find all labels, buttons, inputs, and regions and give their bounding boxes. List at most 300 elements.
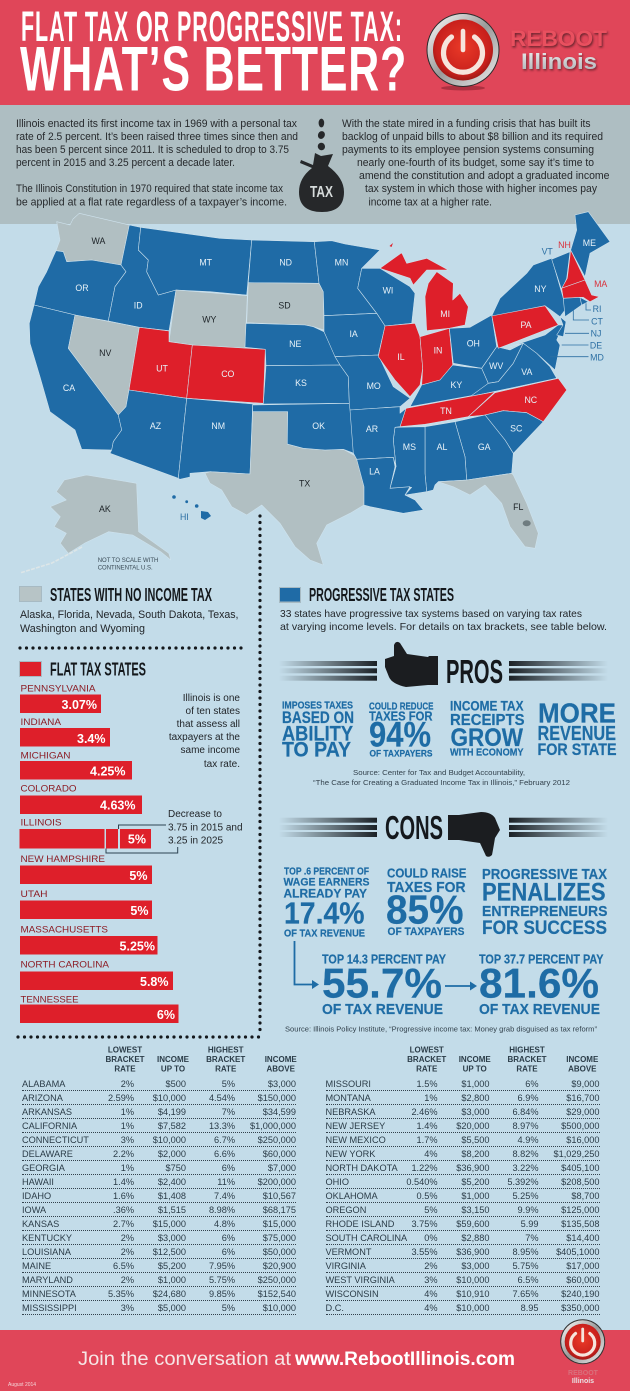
- cons: could raise taxes for 85 percent: 85%: [386, 886, 464, 932]
- table: state tax brackets, Missouri to D.C.: $10,000: [456, 1275, 490, 1285]
- map state labels: VT: [542, 246, 553, 256]
- map state labels: MN: [335, 258, 348, 268]
- map state labels: ID: [134, 300, 143, 310]
- table: state tax brackets, Missouri to D.C.: $36,900: [456, 1163, 490, 1173]
- map state labels: OK: [312, 421, 325, 431]
- table: state tax brackets, Alabama to Mississippi: $1,000: [158, 1275, 186, 1285]
- callout: Illinois is one of ten states: tax rate.: [204, 759, 240, 770]
- table: state tax brackets, Alabama to Mississippi: 13.3%: [209, 1121, 235, 1131]
- table: state tax brackets, Alabama to Mississippi: $2,000: [158, 1149, 186, 1159]
- table: state tax brackets, Missouri to D.C.: $1,000: [461, 1079, 490, 1089]
- bar chart: flat tax rates: MASSACHUSETTS: [20, 924, 108, 934]
- table: state tax brackets, Missouri to D.C.: $135,508: [561, 1219, 600, 1229]
- map state labels: IA: [349, 329, 358, 339]
- map state labels: IL: [397, 352, 405, 362]
- table headers: left: [105, 1046, 297, 1074]
- table: state tax brackets, Alabama to Mississippi: ARIZONA: [22, 1093, 63, 1103]
- table: state tax brackets, Missouri to D.C.: $60,000: [566, 1275, 600, 1285]
- table: state tax brackets, Missouri to D.C.: NEW MEXICO: [326, 1135, 386, 1145]
- pros source: [313, 768, 570, 787]
- table: state tax brackets, Missouri to D.C.: 8.97%: [512, 1121, 538, 1131]
- legend: progressive tax states: at varying income levels. For details on tax brackets, see table below.: [280, 622, 607, 633]
- table: state tax brackets, Missouri to D.C.: 5.392%: [507, 1177, 538, 1187]
- table: state tax brackets, Missouri to D.C.: 0%: [424, 1233, 438, 1243]
- table: state tax brackets, Alabama to Mississippi: CONNECTICUT: [22, 1135, 89, 1145]
- map state labels: NE: [289, 339, 302, 349]
- table: state tax brackets, Alabama to Mississippi: DELAWARE: [22, 1149, 73, 1159]
- table: state tax brackets, Alabama to Mississippi: $5,000: [158, 1303, 186, 1313]
- intro text: left column: be applied at a flat rate regardless of a taxpayer’s income.: [16, 196, 287, 208]
- title: WHAT’S BETTER?: [20, 34, 406, 105]
- cons: top .6 percent pay 17.4 percent: ALREADY PAY: [284, 886, 367, 900]
- map state labels: MD: [590, 352, 604, 362]
- cons: top 37.7 percent pay 81.6 percent: 81.6%: [479, 960, 599, 1007]
- map state labels: IN: [434, 346, 442, 356]
- table: state tax brackets, Alabama to Mississippi: $10,000: [153, 1093, 186, 1103]
- table: state tax brackets, Alabama to Mississippi: $1,515: [158, 1205, 186, 1215]
- footer call to action: Join the conversation at: [78, 1349, 292, 1370]
- table: state tax brackets, Missouri to D.C.: $125,000: [561, 1205, 600, 1215]
- logo wordmark: REBOOT: [511, 28, 609, 52]
- table: state tax brackets, Missouri to D.C.: WISCONSIN: [326, 1289, 379, 1299]
- cons: top 37.7 percent pay 81.6 percent: [479, 952, 604, 1018]
- table: state tax brackets, Alabama to Mississippi: 6%: [222, 1247, 235, 1257]
- pros heading: PROS: [446, 654, 503, 691]
- map scale note: NOT TO SCALE WITH: [98, 558, 158, 564]
- table: state tax brackets, Alabama to Mississippi: $200,000: [258, 1177, 296, 1187]
- table: state tax brackets, Alabama to Mississippi: HAWAII: [22, 1177, 54, 1187]
- map state labels: MI: [440, 309, 450, 319]
- table: state tax brackets, Missouri to D.C.: $59,600: [456, 1219, 490, 1229]
- table: state tax brackets, Alabama to Mississippi: KANSAS: [22, 1219, 59, 1229]
- table: state tax brackets, Missouri to D.C.: NEBRASKA: [326, 1107, 376, 1117]
- table: state tax brackets, Alabama to Mississippi: $10,000: [153, 1135, 186, 1145]
- cons: top 14.3 percent pay 55.7 percent: [322, 952, 447, 1018]
- table: state tax brackets, Missouri to D.C.: MISSOURI: [326, 1079, 371, 1089]
- table: state tax brackets, Alabama to Mississippi: 6%: [222, 1233, 235, 1243]
- map state labels: AZ: [150, 421, 162, 431]
- table: state tax brackets, Missouri to D.C.: 5%: [424, 1205, 438, 1215]
- map state labels: PA: [520, 320, 532, 330]
- map state labels: AK: [99, 504, 111, 514]
- table: state tax brackets, Missouri to D.C.: $2,880: [461, 1233, 490, 1243]
- table: state tax brackets, Alabama to Mississippi: ALABAMA: [22, 1079, 65, 1089]
- pros: imposes taxes based on ability to pay: [282, 701, 354, 762]
- table: state tax brackets, Alabama to Mississippi: $15,000: [263, 1219, 296, 1229]
- cons: top 14.3 percent pay 55.7 percent: TOP 14.3 PERCENT PAY: [322, 952, 447, 966]
- footer logo: [560, 1319, 605, 1385]
- table: state tax brackets, Alabama to Mississippi: 11%: [217, 1177, 235, 1187]
- map state labels: SD: [278, 300, 291, 310]
- bar chart: flat tax rates: 5.25%: [120, 940, 155, 954]
- pros: could reduce taxes for 94 percent: [369, 701, 434, 758]
- table: state tax brackets, Missouri to D.C.: OHIO: [326, 1177, 349, 1187]
- table: state tax brackets, Alabama to Mississippi: $4,199: [158, 1107, 186, 1117]
- cons: top .6 percent pay 17.4 percent: [284, 866, 370, 940]
- table headers: right: HIGHEST: [509, 1046, 545, 1055]
- table: state tax brackets, Alabama to Mississippi: $250,000: [258, 1135, 296, 1145]
- cons: top 37.7 percent pay 81.6 percent: TOP 37.7 PERCENT PAY: [479, 952, 604, 966]
- cons: could raise taxes for 85 percent: OF TAXPAYERS: [388, 926, 464, 938]
- table: state tax brackets, Alabama to Mississippi: $24,680: [153, 1289, 186, 1299]
- map state labels: SC: [510, 424, 523, 434]
- table: state tax brackets, Alabama to Mississippi: 5.75%: [209, 1275, 235, 1285]
- table: state tax brackets, Missouri to D.C.: $350,000: [561, 1303, 600, 1313]
- table: state tax brackets, Missouri to D.C.: $9,000: [571, 1079, 600, 1089]
- intro text: left column: percent in 2015 and 3.25 percent a decade later.: [16, 157, 235, 169]
- icon: thumbs down: [448, 812, 500, 857]
- table: state tax brackets, Missouri to D.C.: 5.25%: [512, 1191, 538, 1201]
- table headers: right: UP TO: [463, 1065, 487, 1074]
- cons: could raise taxes for 85 percent: TAXES FOR: [387, 879, 466, 896]
- table: state tax brackets, Missouri to D.C.: $10,910: [456, 1289, 490, 1299]
- map state labels: KY: [451, 380, 462, 390]
- table: state tax brackets, Missouri to D.C.: 3.55%: [411, 1247, 438, 1257]
- table: state tax brackets, Alabama to Mississippi: 2%: [121, 1247, 134, 1257]
- map state labels: FL: [513, 502, 524, 512]
- bar chart: flat tax rates: 5%: [129, 869, 148, 883]
- cons: top 37.7 percent pay 81.6 percent: OF TAX REVENUE: [479, 1001, 600, 1018]
- logo wordmark: Illinois: [522, 50, 598, 76]
- table: state tax brackets, Missouri to D.C.: $405,1000: [556, 1247, 600, 1257]
- table: state tax brackets, Missouri to D.C.: 4%: [424, 1149, 438, 1159]
- table: state tax brackets, Alabama to Mississippi: 6.7%: [214, 1135, 235, 1145]
- table: state tax brackets, Missouri to D.C.: 4.9%: [518, 1135, 538, 1145]
- map state labels: KS: [295, 378, 307, 388]
- table: state tax brackets, Alabama to Mississippi: 5%: [222, 1079, 235, 1089]
- cons: penalizes entrepreneurs: PROGRESSIVE TAX: [482, 867, 607, 883]
- table: state tax brackets, Alabama to Mississippi: $12,500: [153, 1247, 186, 1257]
- map state labels: RI: [593, 304, 601, 314]
- map state labels: NY: [534, 284, 547, 294]
- pros: imposes taxes based on ability to pay: IMPOSES TAXES: [282, 701, 353, 712]
- pros: income tax receipts grow: GROW: [450, 724, 523, 752]
- table: state tax brackets, Alabama to Mississippi: 3%: [121, 1135, 134, 1145]
- map state labels: CA: [63, 383, 75, 393]
- table: state tax brackets, Alabama to Mississippi: $7,582: [158, 1121, 186, 1131]
- table headers: right: BRACKET: [507, 1055, 547, 1064]
- cons heading: CONS: [385, 810, 443, 847]
- table: state tax brackets, Alabama to Mississippi: MISSISSIPPI: [22, 1303, 77, 1313]
- table: state tax brackets, Alabama to Mississippi: MAINE: [22, 1261, 51, 1271]
- callout: Illinois is one of ten states: of ten states: [186, 706, 240, 717]
- table: state tax brackets, Alabama to Mississippi: 2.2%: [113, 1149, 134, 1159]
- arrow: from 17.4 to 55.7: [294, 941, 319, 989]
- pros: income tax receipts grow: [450, 699, 524, 758]
- table: state tax brackets, Missouri to D.C.: $240,190: [561, 1289, 600, 1299]
- callout: Illinois scheduled decrease: 3.75 in 2015 and: [168, 822, 243, 834]
- table headers: right: LOWEST: [410, 1046, 444, 1055]
- table: state tax brackets, Alabama to Mississippi: $1,408: [158, 1191, 186, 1201]
- table: state tax brackets, Alabama to Mississippi: 7.95%: [209, 1261, 235, 1271]
- map state labels: [63, 236, 607, 522]
- table: state tax brackets, Alabama to Mississippi: 1%: [121, 1121, 134, 1131]
- table: state tax brackets, Alabama to Mississippi: $150,000: [258, 1093, 296, 1103]
- cons source: Source: Illinois Policy Institute, “Progressive income tax: Money grab disguised as tax reform”: [285, 1025, 598, 1034]
- map state labels: TN: [440, 406, 452, 416]
- icon: tax money bag with coins: [299, 119, 344, 212]
- table: state tax brackets, Alabama to Mississippi: $3,000: [158, 1233, 186, 1243]
- legend: states with no income tax: Washington and Wyoming: [20, 623, 145, 635]
- logo: Reboot Illinois power button: [426, 13, 500, 90]
- table: state tax brackets, Alabama to Mississippi: 8.98%: [209, 1205, 235, 1215]
- cons: top 14.3 percent pay 55.7 percent: OF TAX REVENUE: [322, 1001, 443, 1018]
- table: state tax brackets, Missouri to D.C.: 6%: [525, 1079, 538, 1089]
- table: state tax brackets, Missouri to D.C.: $8,200: [461, 1149, 490, 1159]
- pros: could reduce taxes for 94 percent: TAXES FOR: [369, 709, 433, 724]
- map state labels: AR: [366, 424, 378, 434]
- map state labels: NC: [524, 395, 538, 405]
- legend: flat tax states: [19, 660, 146, 680]
- map state labels: OH: [467, 338, 480, 348]
- table headers: left: ABOVE: [266, 1065, 296, 1074]
- table: state tax brackets, Alabama to Mississippi: $152,540: [258, 1289, 296, 1299]
- bar chart: flat tax rates: 3.07%: [62, 698, 97, 712]
- pros: could reduce taxes for 94 percent: COULD REDUCE: [369, 701, 434, 712]
- table: state tax brackets, Alabama to Mississippi: 2%: [121, 1079, 134, 1089]
- cons: penalizes entrepreneurs: ENTREPRENEURS: [482, 904, 608, 920]
- table headers: left: HIGHEST: [208, 1046, 244, 1055]
- logo wordmark: Illinois: [521, 49, 597, 74]
- table: state tax brackets, Missouri to D.C.: 2.46%: [411, 1107, 438, 1117]
- table: state tax brackets, Missouri to D.C.: 6.5%: [518, 1275, 538, 1285]
- table: state tax brackets, Missouri to D.C.: NEW YORK: [326, 1149, 375, 1159]
- header banner: [0, 0, 630, 105]
- table: state tax brackets, Missouri to D.C.: $5,200: [461, 1177, 490, 1187]
- pros: income tax receipts grow: WITH ECONOMY: [450, 748, 524, 758]
- table headers: right: [407, 1046, 599, 1074]
- table: state tax brackets, Missouri to D.C.: 1.7%: [417, 1135, 438, 1145]
- table: state tax brackets, Missouri to D.C.: OREGON: [326, 1205, 366, 1215]
- pros: imposes taxes based on ability to pay: BASED ON: [282, 709, 354, 727]
- map state labels: WI: [383, 286, 393, 296]
- table: state tax brackets, Alabama to Mississippi: 2%: [121, 1233, 134, 1243]
- icon: thumbs up: [385, 642, 438, 687]
- table: state tax brackets, Missouri to D.C.: $3,150: [461, 1205, 490, 1215]
- callout: Illinois is one of ten states: taxpayers at the: [169, 732, 240, 743]
- table: state tax brackets, Missouri to D.C.: 8.82%: [512, 1149, 538, 1159]
- map state labels: CO: [221, 369, 235, 379]
- logo wordmark: [510, 26, 609, 76]
- table: state tax brackets, Missouri to D.C.: $36,900: [456, 1247, 490, 1257]
- table: state tax brackets, Missouri to D.C.: $29,000: [566, 1107, 600, 1117]
- table: state tax brackets, Missouri to D.C.: $3,000: [461, 1261, 490, 1271]
- table: state tax brackets, Alabama to Mississippi: $60,000: [263, 1149, 296, 1159]
- map state labels: NM: [211, 421, 225, 431]
- intro text: right column: income tax at a higher rate.: [368, 196, 492, 208]
- table: state tax brackets, Alabama to Mississippi: $68,175: [263, 1205, 296, 1215]
- cons: top .6 percent pay 17.4 percent: OF TAX REVENUE: [284, 929, 365, 940]
- pros: could reduce taxes for 94 percent: 94%: [369, 716, 431, 755]
- map state labels: UT: [156, 364, 168, 374]
- map state labels: MA: [594, 279, 607, 289]
- table: state tax brackets, Missouri to D.C.: $8,700: [571, 1191, 600, 1201]
- bar chart: flat tax rates: MICHIGAN: [20, 750, 70, 760]
- table: state tax brackets, Alabama to Mississippi: $500: [166, 1079, 186, 1089]
- table headers: left: BRACKET: [105, 1055, 145, 1064]
- table: state tax brackets, Alabama to Mississippi: $10,000: [263, 1303, 296, 1313]
- table: state tax brackets, Alabama to Mississippi: 6%: [222, 1163, 235, 1173]
- legend: states with no income tax: [19, 585, 238, 635]
- table: state tax brackets, Missouri to D.C.: $10,000: [456, 1303, 490, 1313]
- table: state tax brackets, Missouri to D.C.: 4%: [424, 1303, 438, 1313]
- footer call to action: [78, 1349, 515, 1370]
- bar chart: flat tax rates: NORTH CAROLINA: [20, 960, 110, 970]
- bar chart: flat tax rates: PENNSYLVANIA: [20, 684, 96, 694]
- intro text: right column: payments to its employee pension systems consuming: [342, 144, 594, 156]
- table headers: right: INCOME: [566, 1055, 599, 1064]
- table: state tax brackets, Missouri to D.C.: NEW JERSEY: [326, 1121, 385, 1131]
- table: state tax brackets, Alabama to Mississippi: [22, 1079, 296, 1315]
- pros: imposes taxes based on ability to pay: TO PAY: [282, 739, 351, 762]
- callout: Illinois is one of ten states: that assess all: [177, 719, 240, 730]
- table: state tax brackets, Alabama to Mississippi: MINNESOTA: [22, 1289, 76, 1299]
- table: state tax brackets, Missouri to D.C.: $17,000: [566, 1261, 600, 1271]
- map state labels: DE: [590, 340, 602, 350]
- cons: top .6 percent pay 17.4 percent: TOP .6 PERCENT OF: [284, 866, 369, 877]
- title: FLAT TAX OR PROGRESSIVE TAX:: [21, 3, 402, 51]
- footer logo: Illinois: [572, 1378, 594, 1385]
- table headers: left: LOWEST: [108, 1046, 142, 1055]
- pros: income tax receipts grow: INCOME TAX: [450, 699, 524, 714]
- table: state tax brackets, Missouri to D.C.: D.C.: [326, 1303, 344, 1313]
- footer logo: REBOOT: [568, 1370, 599, 1377]
- table: state tax brackets, Alabama to Mississippi: 6.6%: [214, 1149, 235, 1159]
- table: state tax brackets, Alabama to Mississippi: $15,000: [153, 1219, 186, 1229]
- table: state tax brackets, Alabama to Mississippi: 5.35%: [108, 1289, 134, 1299]
- pros: more revenue for state: MORE: [538, 698, 616, 728]
- table: state tax brackets, Alabama to Mississippi: 4.8%: [214, 1219, 235, 1229]
- table: state tax brackets, Alabama to Mississippi: $3,000: [268, 1079, 296, 1089]
- table: state tax brackets, Missouri to D.C.: 6.84%: [512, 1107, 538, 1117]
- table: state tax brackets, Missouri to D.C.: 1.5%: [417, 1079, 438, 1089]
- bar chart: flat tax rates: COLORADO: [20, 784, 76, 794]
- callout: Illinois scheduled decrease: [168, 809, 243, 846]
- table: state tax brackets, Missouri to D.C.: 2%: [424, 1261, 438, 1271]
- table: state tax brackets, Alabama to Mississippi: 2.59%: [108, 1093, 134, 1103]
- table: state tax brackets, Missouri to D.C.: 5.99: [521, 1219, 538, 1229]
- intro text: left column: Illinois enacted its first income tax in 1969 with a personal tax: [16, 118, 298, 130]
- map state labels: AL: [437, 442, 447, 452]
- table: state tax brackets, Alabama to Mississippi: 3%: [121, 1303, 134, 1313]
- bar chart: flat tax rates: 5%: [128, 832, 146, 846]
- map state labels: HI: [180, 512, 189, 522]
- intro text: right column: tax system in which those with higher incomes pay: [365, 183, 598, 195]
- table headers: left: INCOME: [265, 1055, 297, 1064]
- table headers: left: INCOME: [157, 1055, 190, 1064]
- table: state tax brackets, Missouri to D.C.: NORTH DAKOTA: [326, 1163, 398, 1173]
- table: state tax brackets, Missouri to D.C.: MONTANA: [326, 1093, 371, 1103]
- map state labels: ME: [583, 238, 596, 248]
- pros: income tax receipts grow: RECEIPTS: [450, 712, 524, 729]
- callout: Illinois scheduled decrease: 3.25 in 2025: [168, 836, 223, 846]
- intro text: left column: [16, 118, 298, 208]
- cons: penalizes entrepreneurs: FOR SUCCESS: [482, 917, 607, 939]
- table: state tax brackets, Alabama to Mississippi: KENTUCKY: [22, 1233, 72, 1243]
- table: state tax brackets, Alabama to Mississippi: $34,599: [263, 1107, 296, 1117]
- table: state tax brackets, Missouri to D.C.: 8.95: [521, 1303, 538, 1313]
- legend: progressive tax states: 33 states have progressive tax systems based on varying tax rates: [280, 609, 582, 620]
- table: state tax brackets, Missouri to D.C.: 3%: [424, 1275, 438, 1285]
- map state labels: WV: [489, 361, 503, 371]
- intro text: right column: backlog of unpaid bills to about $8 billion and its required: [342, 131, 603, 143]
- table: state tax brackets, Alabama to Mississippi: $250,000: [258, 1275, 296, 1285]
- table: state tax brackets, Missouri to D.C.: 3.22%: [512, 1163, 538, 1173]
- table: state tax brackets, Alabama to Mississippi: 2.7%: [113, 1219, 134, 1229]
- bar chart: flat tax rates: 3.4%: [77, 732, 106, 746]
- table: state tax brackets, Missouri to D.C.: OKLAHOMA: [326, 1191, 378, 1201]
- bar chart: flat tax rates: 5.8%: [140, 975, 168, 989]
- table headers: left: RATE: [114, 1065, 136, 1074]
- table: state tax brackets, Missouri to D.C.: 1.22%: [411, 1163, 438, 1173]
- cons: penalizes entrepreneurs: [482, 867, 608, 939]
- bar chart: flat tax rates: 6%: [157, 1008, 175, 1022]
- bar chart: flat tax rates: INDIANA: [20, 717, 62, 727]
- cons: top 14.3 percent pay 55.7 percent: 55.7%: [322, 960, 442, 1007]
- table: state tax brackets, Missouri to D.C.: 5.75%: [512, 1261, 538, 1271]
- table: state tax brackets, Missouri to D.C.: 1.4%: [417, 1121, 438, 1131]
- pros: more revenue for state: [538, 698, 616, 759]
- map state labels: LA: [369, 466, 380, 476]
- intro text: right column: With the state mired in a funding crisis that has built its: [342, 118, 590, 130]
- map: United States tax systems: [20, 212, 610, 573]
- callout: Illinois is one of ten states: Illinois is one: [183, 693, 240, 704]
- cons: could raise taxes for 85 percent: COULD RAISE: [387, 866, 467, 881]
- table: state tax brackets, Alabama to Mississippi: 1.4%: [113, 1177, 134, 1187]
- table: state tax brackets, Alabama to Mississippi: $10,567: [263, 1191, 296, 1201]
- legend: flat tax states: FLAT TAX STATES: [50, 660, 146, 680]
- legend: states with no income tax: STATES WITH NO INCOME TAX: [50, 585, 212, 605]
- table: state tax brackets, Alabama to Mississippi: 7.4%: [214, 1191, 235, 1201]
- map state labels: NV: [99, 348, 112, 358]
- table: state tax brackets, Missouri to D.C.: 3.75%: [411, 1219, 438, 1229]
- bar chart: flat tax rates: [20, 684, 178, 1023]
- map state labels: OR: [75, 283, 89, 293]
- intro text: left column: The Illinois Constitution in 1970 required that state income tax: [16, 183, 284, 195]
- table: state tax brackets, Missouri to D.C.: $14,400: [566, 1233, 600, 1243]
- table: state tax brackets, Missouri to D.C.: 0.5%: [417, 1191, 438, 1201]
- intro text: right column: amend the constitution and adopt a graduated income: [359, 170, 610, 182]
- table: state tax brackets, Missouri to D.C.: $3,000: [461, 1107, 490, 1117]
- table: state tax brackets, Alabama to Mississippi: $2,400: [158, 1177, 186, 1187]
- bar chart: flat tax rates: 5%: [130, 904, 148, 918]
- bar chart: flat tax rates: NEW HAMPSHIRE: [20, 854, 105, 864]
- cons heading: [279, 810, 608, 857]
- table: state tax brackets, Alabama to Mississippi: 5%: [222, 1303, 235, 1313]
- table: state tax brackets, Missouri to D.C.: $5,500: [461, 1135, 490, 1145]
- table: state tax brackets, Missouri to D.C.: 7.65%: [512, 1289, 538, 1299]
- table: state tax brackets, Alabama to Mississippi: LOUISIANA: [22, 1247, 71, 1257]
- table: state tax brackets, Alabama to Mississippi: 1.6%: [113, 1191, 134, 1201]
- map state labels: GA: [478, 442, 491, 452]
- map state labels: MO: [367, 381, 381, 391]
- table: state tax brackets, Alabama to Mississippi: 9.85%: [209, 1289, 235, 1299]
- table: state tax brackets, Missouri to D.C.: $16,700: [566, 1093, 600, 1103]
- table: state tax brackets, Missouri to D.C.: 7%: [525, 1233, 538, 1243]
- footer call to action: www.RebootIllinois.com: [294, 1349, 515, 1370]
- table: state tax brackets, Alabama to Mississippi: $5,200: [158, 1261, 186, 1271]
- table: state tax brackets, Alabama to Mississippi: .36%: [113, 1205, 134, 1215]
- table: state tax brackets, Alabama to Mississippi: $7,000: [268, 1163, 296, 1173]
- table: state tax brackets, Missouri to D.C.: $500,000: [561, 1121, 600, 1131]
- pros source: Source: Center for Tax and Budget Accountability,: [353, 768, 525, 777]
- cons: could raise taxes for 85 percent: [386, 866, 467, 938]
- callout: Illinois scheduled decrease: Decrease to: [168, 809, 222, 820]
- bar chart: flat tax rates: ILLINOIS: [20, 818, 62, 828]
- arrow: from 55.7 to 81.6: [445, 982, 477, 990]
- bar chart: flat tax rates: 4.25%: [90, 764, 126, 778]
- title: [20, 3, 406, 105]
